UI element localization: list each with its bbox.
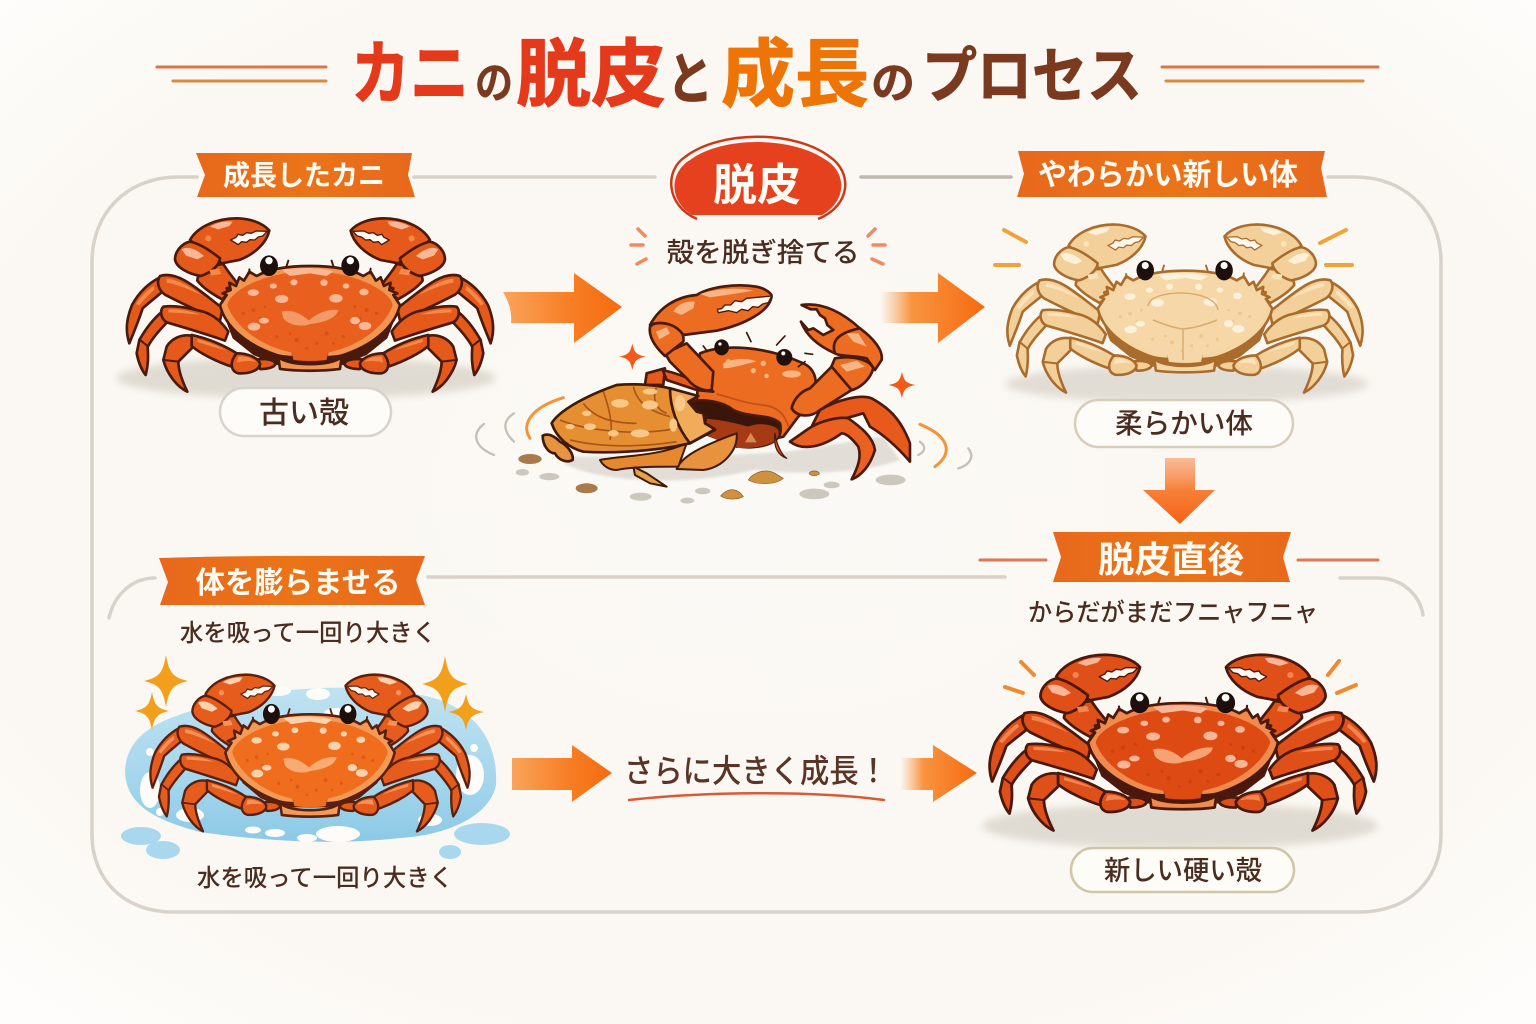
new crab highlights and eyes [656, 289, 867, 378]
ticks [995, 230, 1352, 265]
caption: 水を吸って一回り大きく bottom: 水を吸って一回り大きく [197, 865, 453, 892]
title text: カニ [351, 35, 469, 113]
title text: と [667, 48, 713, 111]
ground shadow [982, 803, 1378, 849]
badge: 脱皮 [671, 137, 845, 219]
title left rules [157, 67, 326, 81]
caption: からだがまだフニャフニャ: からだがまだフニャフニャ [1028, 599, 1318, 627]
pill label: 新しい硬い殻 [1071, 848, 1294, 892]
pill label: 古い殻: 古い殻 [259, 397, 349, 430]
icon: swelling crab [150, 675, 470, 831]
step: just after molting [982, 532, 1378, 892]
badge: 脱皮: 脱皮 [713, 161, 801, 210]
step: soft new body [995, 151, 1369, 447]
caption: 殻を脱ぎ捨てる: 殻を脱ぎ捨てる [666, 238, 860, 268]
title text: プロセス [922, 43, 1142, 110]
caption ticks [631, 229, 885, 264]
icon: molting crab and shed shell [476, 285, 971, 504]
title text: の [871, 59, 915, 108]
title text: 脱皮 [516, 33, 666, 116]
arrow: molting to soft body [880, 273, 985, 343]
panel: process frame lines [92, 177, 1441, 912]
banner: 体を膨らませる [159, 556, 425, 605]
shed shell [543, 384, 737, 487]
title [157, 33, 1378, 116]
title right rules [1162, 67, 1378, 81]
step: grown crab [116, 153, 496, 436]
banner: やわらかい新しい体 [1017, 151, 1327, 197]
motion arcs [476, 398, 971, 468]
banner: 脱皮直後 [1053, 532, 1291, 582]
ground shadow [1005, 365, 1369, 403]
pill label: 柔らかい体 [1075, 400, 1293, 447]
pill label: 古い殻 [220, 388, 391, 436]
step: swelling body [121, 556, 510, 892]
arrow: swelling crab to growth caption [512, 745, 612, 802]
icon: hard-shelled grown crab [990, 655, 1376, 830]
banner: 成長したカニ [196, 153, 415, 197]
ground shadow and pebbles [516, 437, 906, 504]
icon: pale soft crab [1007, 224, 1363, 393]
pill label: 新しい硬い殻: 新しい硬い殻 [1104, 856, 1262, 886]
sparkles [619, 343, 915, 398]
step: molting [476, 137, 971, 504]
arrow: after molt from growth caption [900, 745, 977, 802]
banner: 体を膨らませる: 体を膨らませる [196, 567, 400, 600]
caption: 水を吸って一回り大きく top: 水を吸って一回り大きく [180, 620, 436, 647]
banner: 成長したカニ: 成長したカニ [223, 160, 385, 191]
title text [351, 33, 1142, 116]
pill label: 柔らかい体: 柔らかい体 [1115, 408, 1253, 439]
ticks [1005, 661, 1356, 693]
new crab [645, 285, 910, 479]
title text: の [475, 59, 513, 108]
callout: さらに大きく成長！: さらに大きく成長！ [624, 753, 888, 789]
banner: 脱皮直後: 脱皮直後 [1098, 539, 1244, 580]
banner: やわらかい新しい体: やわらかい新しい体 [1038, 159, 1298, 192]
sparkles [135, 655, 484, 730]
ground shadow [116, 357, 496, 399]
arrow: grown crab to molting [503, 273, 622, 343]
arrow: soft body down to after molt [1143, 458, 1215, 524]
water pool [121, 686, 510, 859]
title text: 成長 [721, 33, 869, 116]
icon: red crab with old shell [127, 218, 493, 392]
